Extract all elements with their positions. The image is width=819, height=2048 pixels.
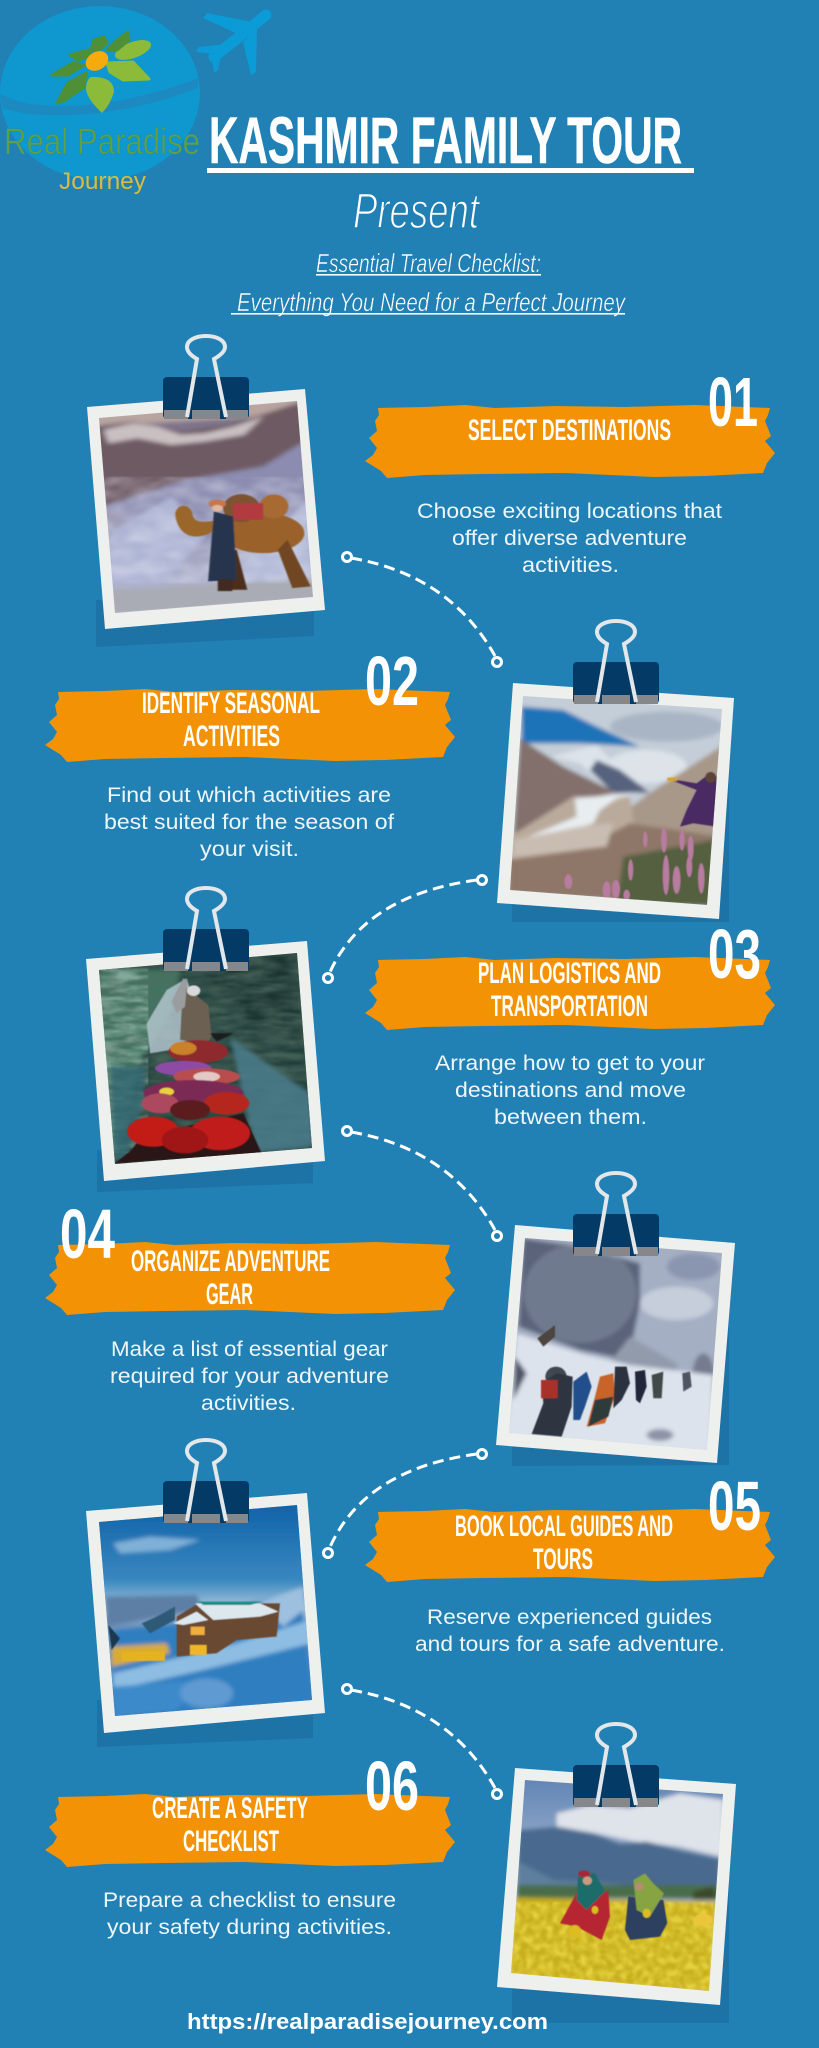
description: required for your adventure <box>110 1365 389 1388</box>
logo name: Real Paradise <box>4 121 200 162</box>
heading <box>142 687 320 753</box>
description: Prepare a checklist to ensure <box>103 1889 396 1912</box>
heading <box>455 1510 673 1576</box>
number: 04 <box>60 1195 115 1273</box>
number: 03 <box>708 915 761 993</box>
description: and tours for a safe adventure. <box>415 1633 725 1656</box>
heading: ACTIVITIES <box>183 720 280 753</box>
number: 06 <box>365 1747 419 1825</box>
heading: ORGANIZE ADVENTURE <box>131 1245 330 1278</box>
number: 01 <box>708 363 758 441</box>
description: Make a list of essential gear <box>111 1338 388 1361</box>
binder clip <box>573 1724 659 1807</box>
description: your visit. <box>200 838 299 861</box>
banner <box>45 1794 455 1867</box>
description <box>110 1338 389 1415</box>
description <box>415 1606 725 1656</box>
description: Choose exciting locations that <box>417 500 722 523</box>
description <box>104 784 394 861</box>
website link: https://realparadisejourney.com <box>187 2009 548 2034</box>
description: Arrange how to get to your <box>435 1052 705 1075</box>
banner <box>45 689 455 762</box>
connector 5 <box>342 1684 502 1798</box>
step 2 <box>45 621 734 922</box>
heading: CREATE A SAFETY <box>152 1792 308 1825</box>
description: activities. <box>201 1392 296 1415</box>
heading <box>478 957 661 1023</box>
description <box>417 500 722 577</box>
binder clip <box>163 1440 249 1523</box>
step 3 <box>86 888 775 1192</box>
description: Find out which activities are <box>107 784 391 807</box>
description: activities. <box>522 554 619 577</box>
logo: Real Paradise Journey <box>0 6 200 195</box>
heading: SELECT DESTINATIONS <box>468 414 671 447</box>
banner <box>365 1509 775 1582</box>
step 6 <box>45 1724 736 2023</box>
heading <box>152 1792 308 1858</box>
photo: flower boat on lake <box>86 888 325 1192</box>
number: 05 <box>708 1467 761 1545</box>
heading: TOURS <box>533 1543 593 1576</box>
binder clip <box>163 336 249 419</box>
connector 4 <box>324 1450 486 1558</box>
connector 2 <box>324 876 486 982</box>
heading: IDENTIFY SEASONAL <box>142 687 320 720</box>
icon: flower <box>52 32 154 113</box>
logo subtitle: Journey <box>59 168 146 195</box>
description: your safety during activities. <box>107 1916 392 1939</box>
photo: snowy chalet <box>86 1440 325 1747</box>
connector 1 <box>342 552 502 666</box>
tagline: Everything You Need for a Perfect Journey <box>237 287 627 317</box>
binder clip <box>573 621 659 704</box>
photo: camel and man <box>87 336 325 647</box>
heading <box>131 1245 330 1311</box>
binder clip <box>163 888 249 971</box>
banner <box>365 957 775 1030</box>
binder clip <box>573 1173 659 1256</box>
number: 02 <box>365 642 419 720</box>
photo: snow trek <box>496 1173 735 1466</box>
description: best suited for the season of <box>104 811 394 834</box>
banner <box>365 405 775 478</box>
description: between them. <box>494 1106 647 1129</box>
heading: CHECKLIST <box>183 1825 279 1858</box>
heading: PLAN LOGISTICS AND <box>478 957 661 990</box>
step 1 <box>87 336 775 647</box>
step 5 <box>86 1440 775 1747</box>
subtitle: Present: Present <box>353 183 481 239</box>
banner <box>45 1242 455 1315</box>
description <box>435 1052 705 1129</box>
heading: TRANSPORTATION <box>491 990 648 1023</box>
heading: GEAR <box>206 1278 253 1311</box>
connector 3 <box>342 1126 502 1240</box>
photo: glacier valley <box>497 621 734 922</box>
icon: airplane <box>196 13 266 75</box>
description: destinations and move <box>455 1079 686 1102</box>
tagline: Essential Travel Checklist: <box>316 248 541 278</box>
description <box>103 1889 396 1939</box>
tagline <box>231 248 627 317</box>
step 4 <box>45 1173 735 1466</box>
description: offer diverse adventure <box>452 527 687 550</box>
description: Reserve experienced guides <box>427 1606 712 1629</box>
photo: mustard field <box>497 1724 736 2023</box>
